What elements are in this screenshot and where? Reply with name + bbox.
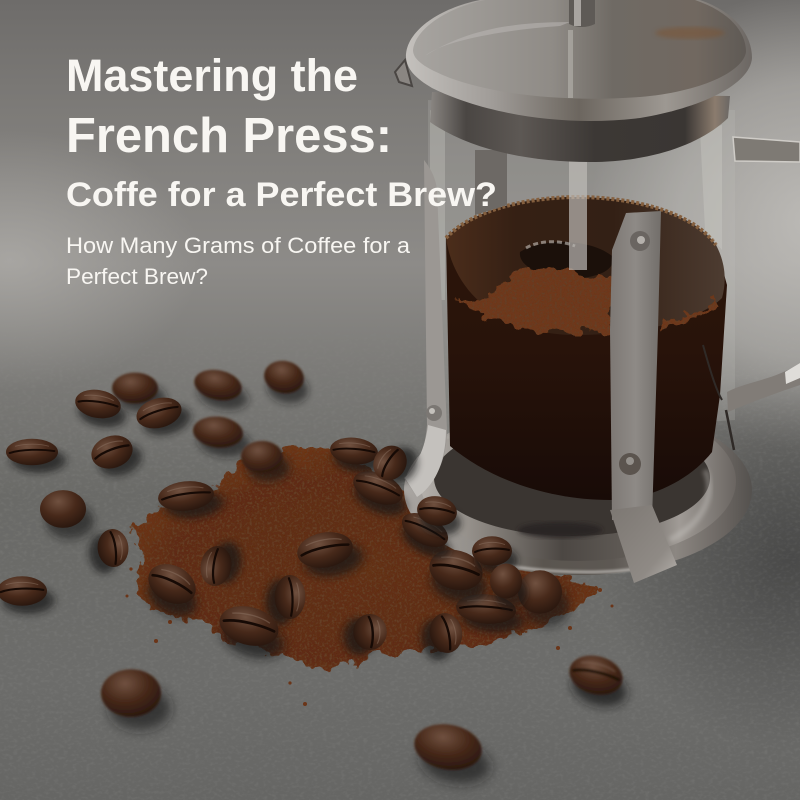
lid	[395, 0, 752, 121]
front metal strap	[610, 211, 677, 583]
left metal strap	[404, 160, 447, 497]
title	[66, 50, 497, 214]
coffee liquid	[446, 197, 727, 500]
coffee beans	[0, 357, 635, 790]
subtitle	[66, 233, 410, 289]
beans, on the pile	[136, 435, 570, 665]
title: French Press:	[66, 109, 392, 163]
title: Coffe for a Perfect Brew?	[66, 176, 497, 214]
glass highlights	[430, 110, 722, 300]
coffee grounds pile	[126, 446, 614, 706]
upper handle	[733, 137, 800, 162]
beans, rear blurred group	[112, 357, 314, 482]
lid band	[430, 92, 730, 162]
floating coffee grounds	[456, 268, 716, 333]
subtitle: Perfect Brew?	[66, 264, 208, 289]
base	[404, 401, 752, 575]
rear strap	[475, 150, 507, 215]
title: Mastering the	[66, 50, 358, 101]
french press	[395, 0, 800, 583]
glass beaker	[428, 100, 735, 440]
beans, out of focus foreground	[101, 650, 635, 790]
subtitle: How Many Grams of Coffee for a	[66, 233, 410, 258]
beans, scattered left	[0, 386, 194, 614]
plunger rod, above the lid	[569, 0, 595, 27]
lower handle	[703, 345, 800, 450]
plunger rod, inside the glass	[569, 160, 587, 270]
